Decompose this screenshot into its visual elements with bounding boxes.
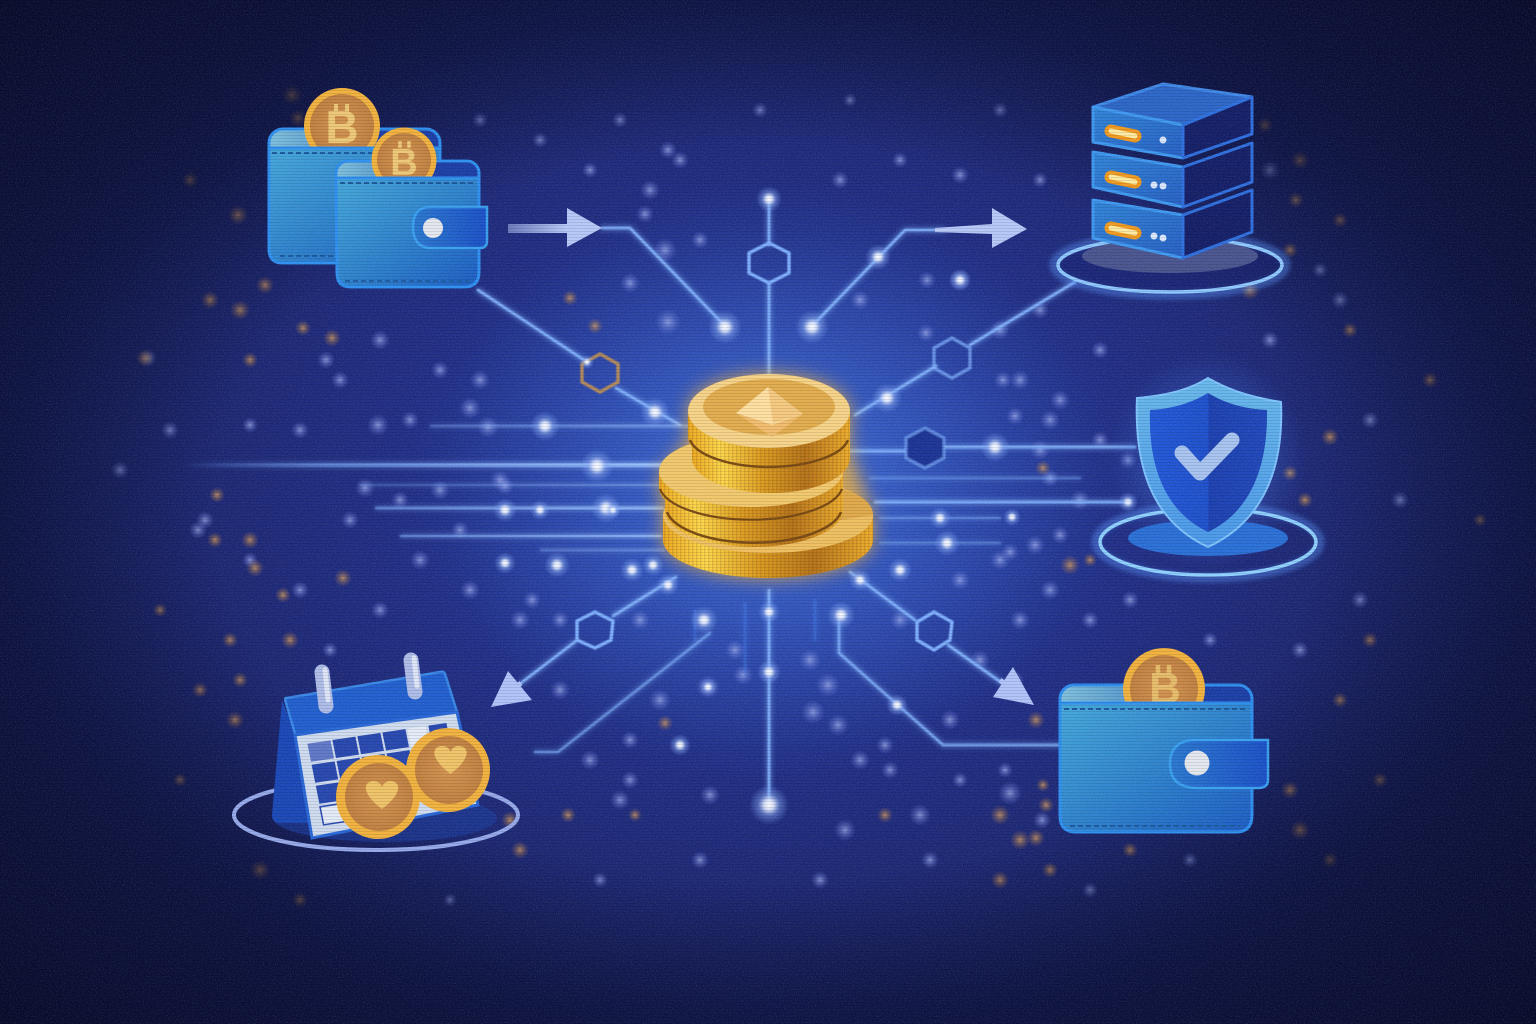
calendar platform	[234, 780, 518, 850]
arrow: network to wallet	[993, 667, 1034, 705]
center glow	[438, 180, 1098, 780]
middle server unit	[1093, 143, 1252, 207]
front wallet rim	[336, 161, 479, 221]
second coin	[692, 440, 850, 493]
icon: server stack	[1054, 84, 1286, 295]
arrow: network to calendar	[491, 671, 532, 707]
calendar flap	[272, 700, 310, 823]
heart coin left	[336, 755, 420, 839]
arrow: network to server	[935, 208, 1027, 248]
check mark	[1182, 440, 1232, 473]
hexagon nodes	[577, 243, 970, 650]
icon: diamond emblem	[736, 387, 803, 437]
back coin	[304, 88, 380, 164]
top coin	[688, 374, 850, 470]
heart coin right	[406, 728, 490, 812]
central coin stack	[659, 374, 873, 578]
circuit lines	[478, 198, 1135, 805]
wallet rim	[1060, 685, 1252, 745]
front coin: B	[390, 142, 418, 184]
fourth coin	[665, 470, 843, 547]
server platform	[1054, 235, 1286, 295]
third coin	[659, 435, 843, 523]
calendar page	[295, 712, 478, 838]
wallet clasp	[1170, 740, 1268, 788]
calendar grid	[307, 723, 463, 825]
icon: single crypto wallet	[1060, 648, 1268, 832]
front coin	[372, 128, 436, 192]
particle field: blue	[111, 93, 1409, 907]
shield body	[1137, 378, 1281, 547]
icon: twin crypto wallets	[269, 88, 487, 287]
icon: security shield	[1096, 350, 1320, 578]
wallet pocket	[1060, 703, 1252, 832]
arrow: wallets to network	[508, 208, 602, 247]
wallet coin: B	[1149, 664, 1181, 713]
top server unit	[1093, 84, 1252, 158]
back wallet rim	[269, 129, 440, 263]
horizontal data lines: left	[180, 426, 690, 550]
shield platform	[1096, 506, 1320, 578]
particle field: amber	[136, 85, 1487, 908]
front wallet pocket	[336, 178, 479, 287]
back coin: B	[325, 101, 359, 153]
wallet coin	[1123, 648, 1205, 730]
wallet clasp	[413, 207, 487, 248]
back wallet pocket	[269, 148, 440, 263]
glowing nodes	[493, 186, 1138, 825]
calendar rings	[322, 658, 417, 706]
calendar header	[285, 672, 458, 737]
bottom server unit	[1093, 190, 1252, 258]
icon: calendar with heart coins	[234, 658, 518, 850]
bottom coin	[663, 477, 873, 578]
